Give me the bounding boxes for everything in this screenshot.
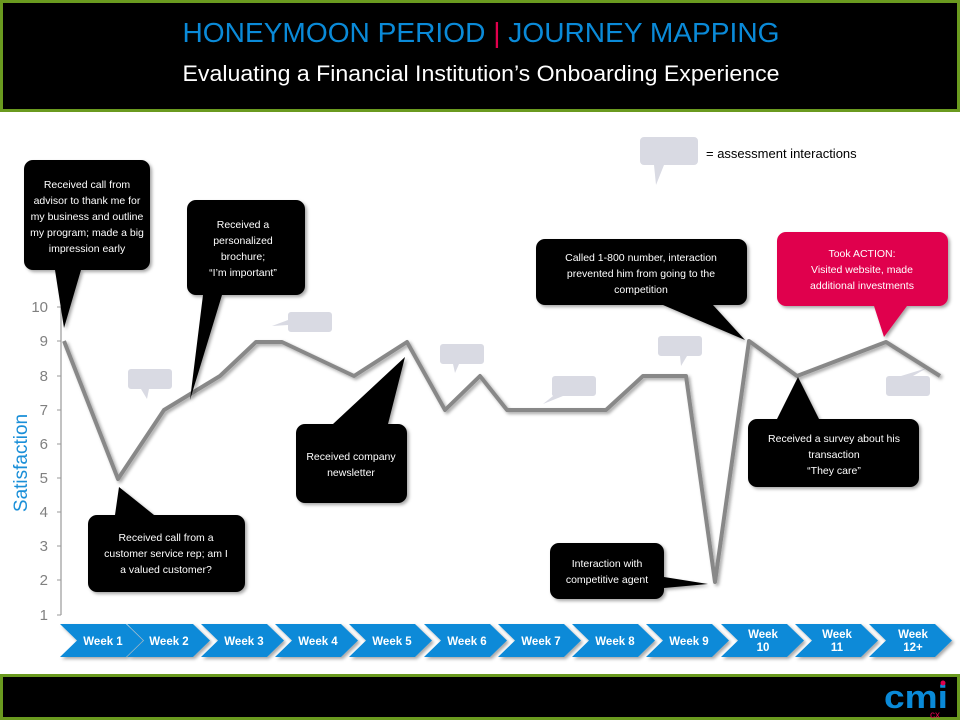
callout: newsletter: newsletter: [327, 467, 375, 479]
callout: survey: [748, 377, 919, 487]
callout: advisor call: my business and outline: [31, 211, 143, 223]
callout: brochure: brochure;: [221, 251, 265, 263]
callout: 1-800 number: [536, 239, 747, 340]
y axis: 7: [40, 402, 48, 419]
callout: competitive agent: [550, 543, 708, 599]
week chevrons: Week 9: [669, 636, 709, 648]
week chevrons: Week: [898, 629, 929, 641]
legend: = assessment interactions: [706, 146, 857, 161]
week chevrons: Week 5: [372, 636, 412, 648]
callout: customer service rep: customer service rep; am I: [104, 548, 228, 560]
callout: brochure: personalized: [213, 235, 273, 247]
callout: advisor call: [24, 160, 150, 328]
callout: brochure: “I’m important”: [209, 267, 277, 279]
callout: took action: Took ACTION:: [828, 248, 896, 260]
y axis: [31, 299, 61, 624]
subtitle: Evaluating a Financial Institution’s Onboarding Experience: [182, 61, 780, 86]
y axis: 4: [40, 504, 48, 521]
week chevrons: Week 1: [83, 636, 123, 648]
week chevrons: 11: [831, 642, 844, 654]
assessment bubbles: [128, 312, 930, 404]
week chevrons: Week: [822, 629, 853, 641]
y axis: 2: [40, 572, 48, 589]
callout: competitive agent: competitive agent: [566, 574, 648, 586]
logo: cmi cx: cmi: [884, 679, 948, 715]
week chevrons: Week 6: [447, 636, 487, 648]
satisfaction line: [64, 341, 940, 582]
y axis: 10: [31, 299, 48, 316]
callout: brochure: Received a: [217, 219, 269, 231]
y axis: 5: [40, 470, 48, 487]
callout: survey: Received a survey about his: [768, 433, 900, 445]
callout: brochure: [187, 200, 305, 400]
y axis: 9: [40, 333, 48, 350]
week chevrons: 12+: [903, 642, 923, 654]
week chevrons: [60, 624, 952, 657]
callout: 1-800 number: Called 1-800 number, interaction: [565, 252, 717, 264]
callout: 1-800 number: competition: [614, 284, 668, 296]
y axis: 1: [40, 607, 48, 624]
legend: [640, 137, 857, 185]
callout: advisor call: impression early: [49, 243, 126, 255]
callout: took action: additional investments: [810, 280, 914, 292]
callout: newsletter: Received company: [306, 451, 396, 463]
footer banner: [2, 676, 958, 720]
callout: advisor call: my program; made a big: [30, 227, 144, 239]
week chevrons: Week 4: [298, 636, 338, 648]
callout: took action: Visited website, made: [811, 264, 913, 276]
callout: advisor call: advisor to thank me for: [34, 195, 141, 207]
week chevrons: Week 3: [224, 636, 264, 648]
callout: competitive agent: Interaction with: [572, 558, 642, 570]
header banner: [2, 2, 958, 110]
callout: survey: transaction: [808, 449, 860, 461]
week chevrons: Week: [748, 629, 779, 641]
title: HONEYMOON PERIOD | JOURNEY MAPPING: [182, 17, 780, 48]
y axis label: Satisfaction: [11, 414, 32, 512]
y axis: 8: [40, 368, 48, 385]
callout: survey: “They care”: [807, 465, 861, 477]
week chevrons: Week 7: [521, 636, 561, 648]
week chevrons: Week 2: [149, 636, 189, 648]
callout: customer service rep: Received call from a: [118, 532, 214, 544]
y axis: 6: [40, 436, 48, 453]
callout: newsletter: [296, 357, 407, 503]
callout: 1-800 number: prevented him from going to the: [567, 268, 715, 280]
week chevrons: Week 8: [595, 636, 635, 648]
callout: advisor call: Received call from: [44, 179, 130, 191]
callout: took action: [777, 232, 948, 337]
y axis: 3: [40, 538, 48, 555]
week chevrons: 10: [757, 642, 769, 654]
callout: customer service rep: a valued customer?: [120, 564, 212, 576]
callout: customer service rep: [88, 487, 245, 592]
